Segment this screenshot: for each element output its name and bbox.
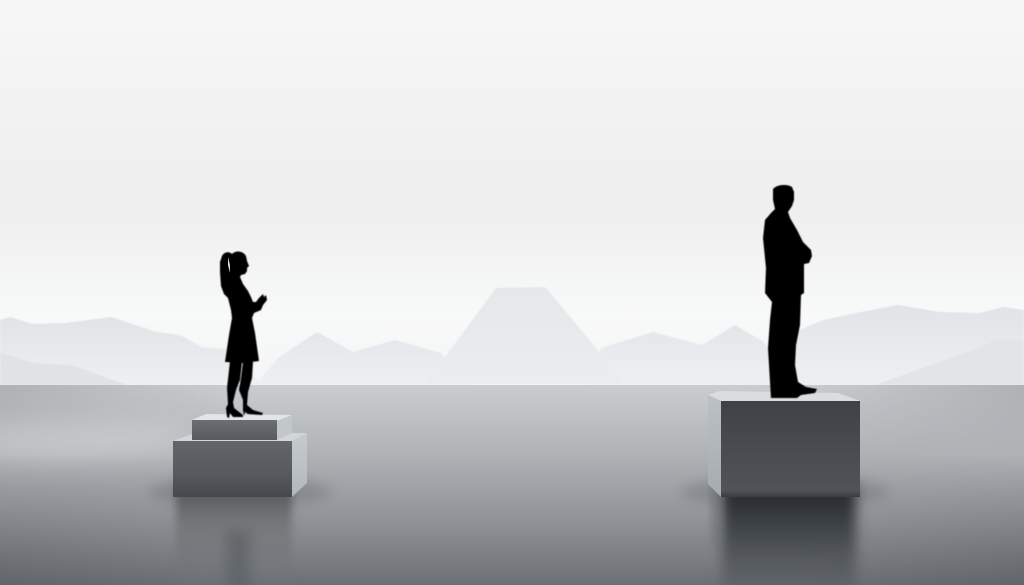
illustration: two silhouettes on unequal plinths bbox=[0, 184, 1024, 585]
silhouette: woman bbox=[220, 252, 267, 418]
mountains: front right ridge bbox=[875, 340, 1024, 385]
woman left leg and heel bbox=[226, 361, 243, 418]
lower step front face bbox=[173, 441, 292, 497]
base shadow: right plinth bbox=[680, 476, 890, 508]
sky background bbox=[0, 0, 1024, 386]
mountains: far right range bbox=[780, 305, 1024, 386]
woman right leg and heel bbox=[239, 362, 263, 416]
floor lighting bbox=[0, 385, 1024, 585]
mountains: middle left peaks bbox=[255, 332, 470, 386]
reflection: right plinth bbox=[710, 484, 856, 585]
plinth: low two-step stand bbox=[173, 414, 307, 497]
upper step front face bbox=[192, 420, 277, 440]
block top face bbox=[708, 391, 860, 401]
reflective floor bbox=[0, 385, 1024, 585]
mountains: middle right peaks bbox=[590, 325, 790, 386]
woman head, ponytail, torso and dress bbox=[220, 252, 267, 363]
lower step top face bbox=[173, 433, 307, 441]
mountains: front left ridge bbox=[0, 352, 127, 385]
reflection: left plinth bbox=[176, 486, 292, 585]
base shadow: left plinth bbox=[148, 476, 332, 508]
mountain: central peak bbox=[425, 287, 624, 384]
hair gap highlight bbox=[228, 257, 230, 273]
upper step side face bbox=[277, 415, 292, 440]
block front face bbox=[721, 401, 860, 497]
upper step top face bbox=[192, 414, 292, 421]
distant mountain ranges bbox=[0, 287, 1024, 386]
mountains: back left range bbox=[0, 317, 260, 386]
floor highlight: left bbox=[0, 420, 205, 456]
plinth: tall single block bbox=[708, 391, 860, 497]
block left face bbox=[708, 395, 721, 497]
lower step side face bbox=[292, 433, 307, 497]
floor edge falloff bbox=[0, 385, 1024, 585]
silhouette: man bbox=[763, 185, 817, 398]
